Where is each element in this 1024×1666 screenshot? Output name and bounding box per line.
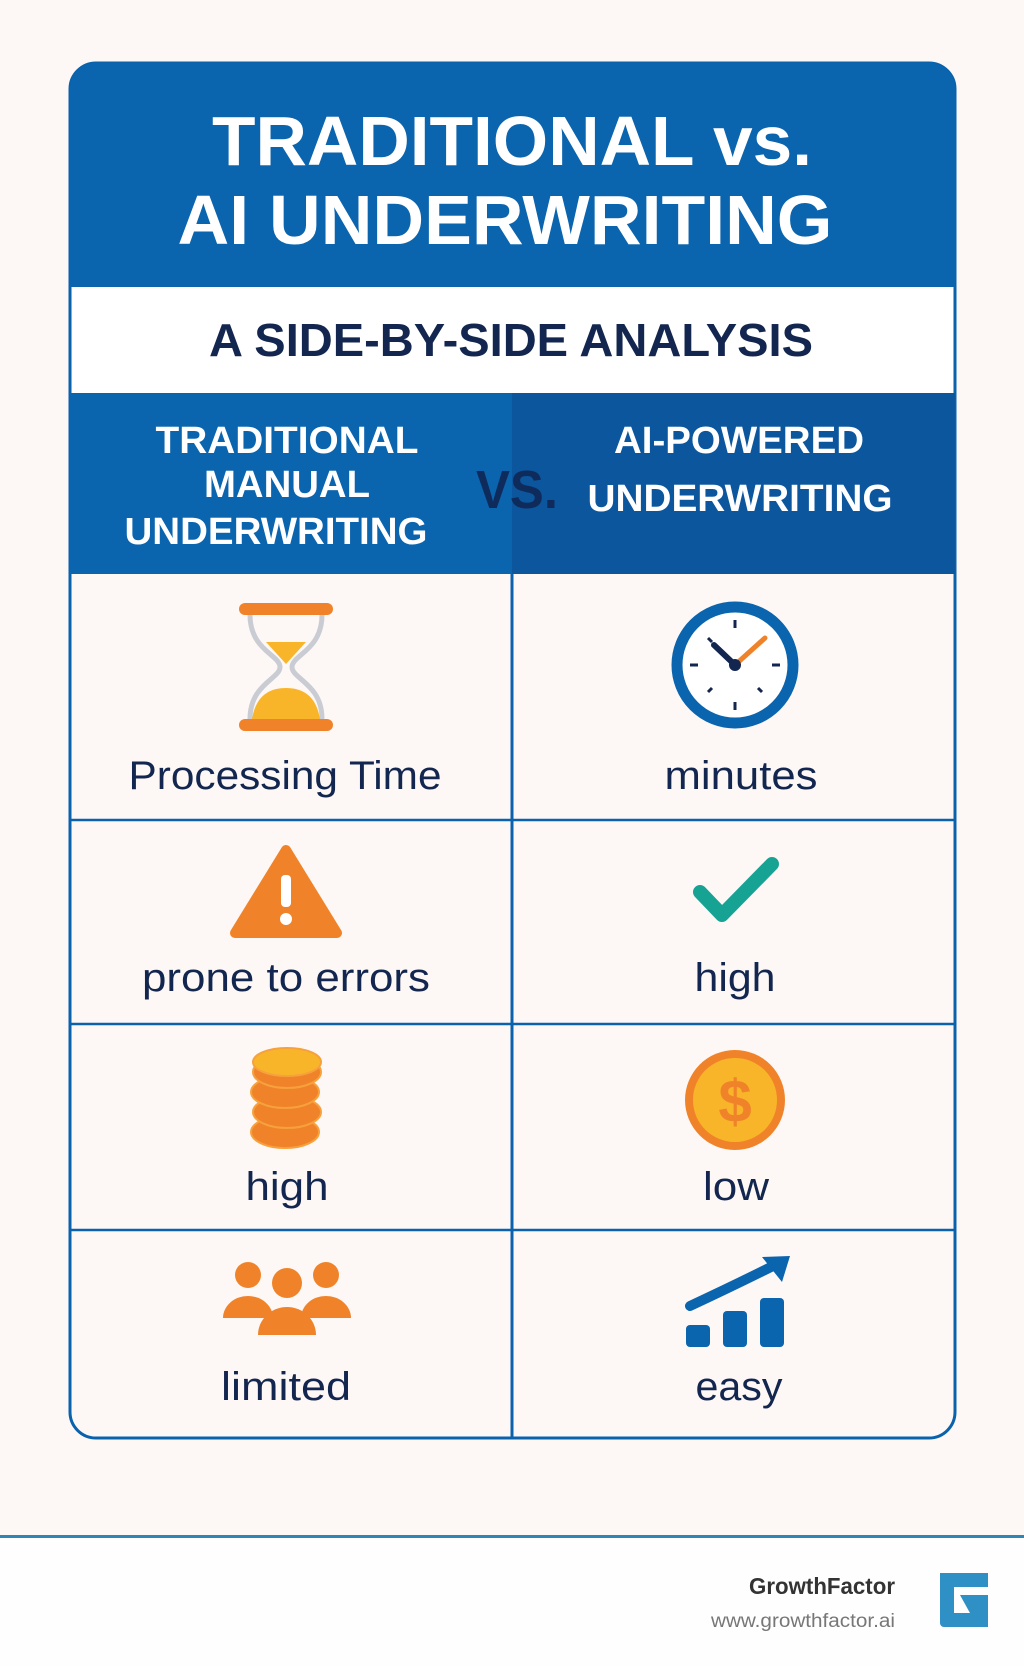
text: easy: easy bbox=[696, 1365, 782, 1409]
icon: warning bbox=[235, 850, 337, 933]
icon: growth chart bbox=[686, 1256, 790, 1347]
column header: traditional: UNDERWRITING bbox=[124, 511, 428, 553]
icon: dollar coin: $ bbox=[718, 1068, 752, 1135]
column header: traditional: MANUAL bbox=[204, 464, 370, 506]
icon: dollar coin bbox=[685, 1050, 785, 1150]
icon: GrowthFactor logo bbox=[940, 1573, 988, 1627]
column header: AI-powered: UNDERWRITING bbox=[588, 478, 892, 520]
vs label: VS. bbox=[476, 460, 558, 520]
subtitle band: A SIDE-BY-SIDE ANALYSIS bbox=[209, 314, 813, 366]
text: minutes: minutes bbox=[664, 754, 818, 798]
column header: traditional: TRADITIONAL bbox=[156, 420, 418, 462]
title band bbox=[70, 63, 955, 287]
icon: checkmark bbox=[700, 864, 772, 915]
column header: AI-powered bbox=[512, 393, 955, 574]
footer brand text bbox=[710, 1573, 895, 1632]
title band: AI UNDERWRITING bbox=[178, 181, 832, 259]
text: limited: limited bbox=[221, 1365, 351, 1409]
text: high (cost): high bbox=[246, 1165, 328, 1209]
subtitle band bbox=[72, 287, 953, 393]
icon: clock bbox=[677, 607, 793, 723]
text: prone to errors: prone to errors bbox=[142, 956, 430, 1000]
card: comparison table bbox=[70, 63, 955, 1438]
footer brand text: www.growthfactor.ai bbox=[710, 1611, 895, 1632]
icon: people bbox=[223, 1262, 351, 1335]
footer brand text: GrowthFactor bbox=[749, 1573, 895, 1599]
text: low: low bbox=[703, 1165, 769, 1209]
column header: AI-powered: AI-POWERED bbox=[614, 420, 864, 462]
column header: traditional bbox=[70, 393, 512, 574]
text: high (accuracy): high bbox=[694, 956, 776, 1000]
icon: hourglass bbox=[239, 603, 333, 731]
text: Processing Time: Processing Time bbox=[128, 754, 442, 798]
icon: coins stack bbox=[251, 1048, 321, 1148]
title band: TRADITIONAL vs. bbox=[212, 102, 812, 180]
